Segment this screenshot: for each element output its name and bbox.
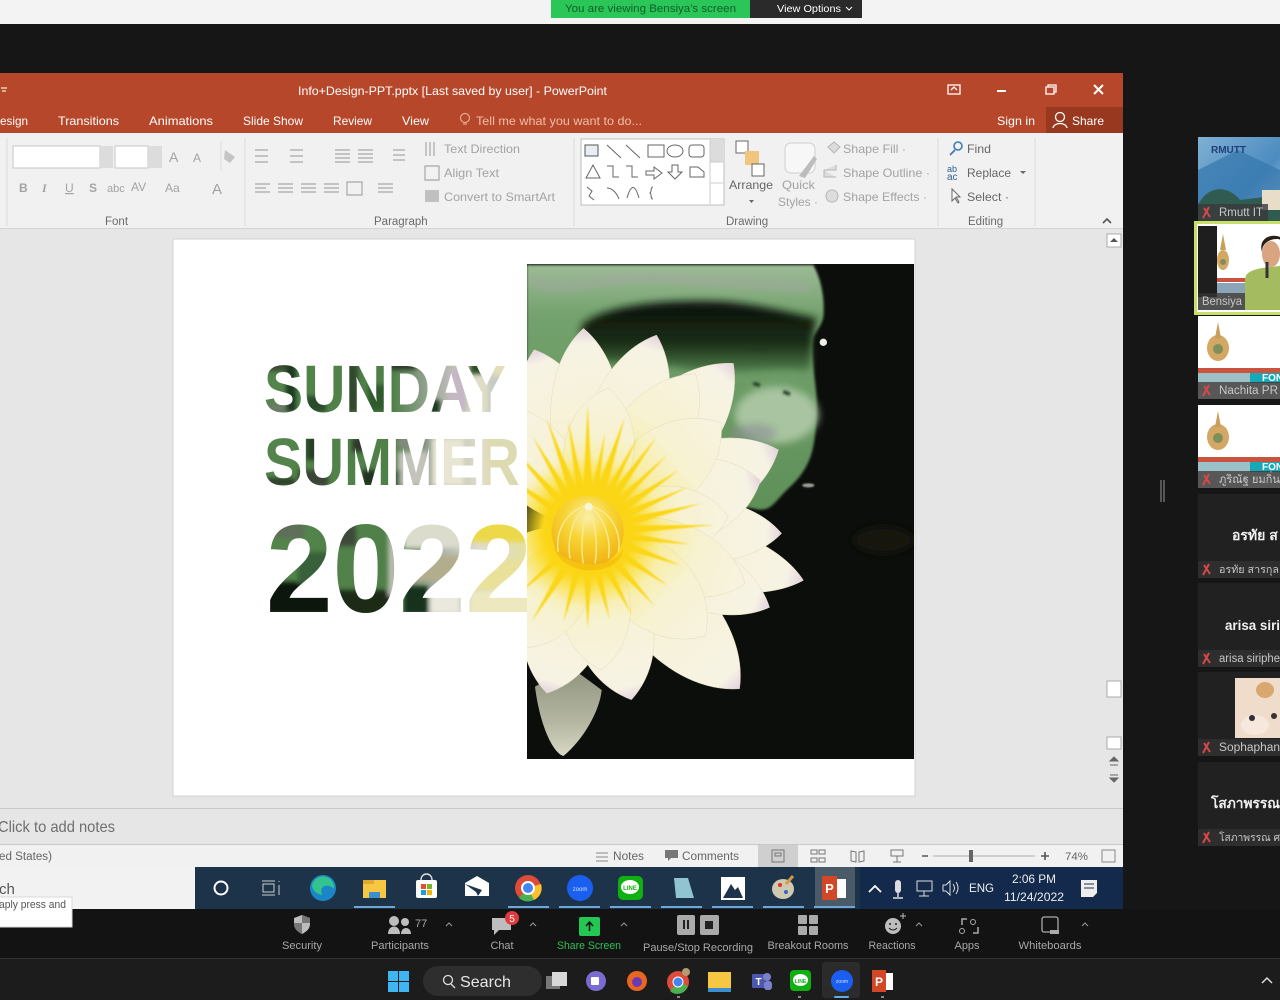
participant tile: Thai name one: อรทัย สารกุล xyxy=(1219,564,1279,576)
participant tile: Sophaphan: Sophaphan xyxy=(1219,742,1280,754)
ribbon xyxy=(0,133,1123,229)
zoom top notification bar: View Options xyxy=(777,3,841,15)
tooltip: aply press and xyxy=(0,899,66,911)
paragraph group: Paragraph xyxy=(374,216,428,228)
windows search strip xyxy=(0,867,195,909)
participant tile: arisa xyxy=(1198,583,1280,667)
ribbon tabs: esign xyxy=(0,114,28,128)
editing group: Replace xyxy=(967,166,1011,180)
apps: Apps xyxy=(954,940,980,952)
title text: SUNDAY SUMMER 2022: 2022 xyxy=(266,500,532,639)
apps xyxy=(954,919,980,952)
participant tile: Thai name one xyxy=(1198,494,1280,578)
icon: notebook xyxy=(674,878,694,898)
font group: abc xyxy=(107,183,125,195)
share screen: Share Screen xyxy=(557,940,621,952)
status bar xyxy=(0,845,1123,867)
ribbon tabs: Tell me what you want to do... xyxy=(476,114,642,128)
drawing group xyxy=(726,141,930,228)
participant tile: Thai name with emblem xyxy=(1198,405,1280,488)
icon: zoom active: zoom xyxy=(836,979,848,985)
drawing group: Quick xyxy=(782,178,816,192)
drawing group: Drawing xyxy=(726,216,768,228)
icon: chrome xyxy=(667,968,690,994)
remote windows taskbar xyxy=(195,867,1123,909)
local windows 11 taskbar xyxy=(0,959,1280,1000)
tooltip xyxy=(0,897,72,927)
editing group: ab xyxy=(947,164,957,174)
font group xyxy=(13,142,235,228)
gallery drag handle xyxy=(1161,480,1164,502)
icon: line: LINE xyxy=(795,979,807,985)
icon: file explorer xyxy=(363,880,386,898)
font group: Aa xyxy=(165,181,180,195)
icon: line xyxy=(790,970,811,991)
drawing group: Shape Outline · xyxy=(843,166,930,180)
title text: SUNDAY SUMMER 2022 xyxy=(264,352,532,639)
back sepal xyxy=(535,667,602,756)
ribbon tabs: View xyxy=(402,114,429,128)
participant tile: Thai name two: โสภาพรรณ xyxy=(1210,794,1280,811)
icon: palette xyxy=(772,876,794,899)
status bar: 74% xyxy=(1065,851,1088,863)
paragraph group xyxy=(255,142,556,228)
petals xyxy=(527,328,804,700)
powerpoint title bar: Info+Design-PPT.pptx [Last saved by user] - PowerPoint xyxy=(298,84,608,98)
editing group xyxy=(947,142,1111,228)
editing group: ac xyxy=(947,172,958,183)
drawing group: Shape Fill · xyxy=(843,142,906,156)
emblem xyxy=(1217,234,1229,270)
yellow stamens xyxy=(527,406,714,628)
system tray: ENG xyxy=(969,881,994,895)
system tray xyxy=(869,872,1097,904)
ribbon tabs: Animations xyxy=(149,114,213,128)
font group: U xyxy=(65,181,74,195)
editing group: Find xyxy=(967,142,991,156)
chat xyxy=(490,911,536,952)
icon: store xyxy=(416,874,437,898)
participant tile: arisa: arisa siriphe xyxy=(1219,653,1280,665)
title text: SUNDAY SUMMER 2022: SUMMER xyxy=(264,425,520,500)
participants: Participants xyxy=(371,940,429,952)
cortana and task view xyxy=(214,882,228,894)
ribbon tabs: Slide Show xyxy=(243,114,303,128)
participant tile: Thai name two xyxy=(1198,762,1280,846)
security: Security xyxy=(282,940,322,952)
system tray: 2:06 PM xyxy=(1012,872,1056,886)
icon: chat meet xyxy=(586,971,606,991)
icon: chrome xyxy=(515,875,542,901)
shapes gallery xyxy=(581,139,724,205)
status bar: ed States) xyxy=(0,851,52,863)
search pill xyxy=(423,966,542,996)
pause stop recording xyxy=(643,915,753,954)
system tray: 11/24/2022 xyxy=(1004,890,1064,904)
icon: edge xyxy=(310,875,336,901)
participant tile: Bensiya xyxy=(1196,222,1280,314)
font group: I xyxy=(41,181,48,195)
participants: 77 xyxy=(415,918,427,930)
icon: line xyxy=(618,876,643,900)
drawing group: Arrange xyxy=(729,178,773,192)
chat: 5 xyxy=(509,914,515,925)
icon: powerpoint xyxy=(872,970,893,992)
participant tile: Rmutt IT: RMUTT xyxy=(1211,145,1246,156)
participant tile: Bensiya: Bensiya xyxy=(1202,296,1243,308)
zoom meeting toolbar xyxy=(0,909,1280,959)
powerpoint title bar xyxy=(0,73,1123,133)
status bar: Notes xyxy=(613,849,644,863)
drawing group: Styles · xyxy=(778,195,818,209)
whiteboards: Whiteboards xyxy=(1018,940,1082,952)
reactions: Reactions xyxy=(868,940,916,952)
icon: line: LINE xyxy=(623,886,637,892)
ribbon tabs: Transitions xyxy=(58,114,119,128)
security xyxy=(282,915,322,952)
breakout rooms: Breakout Rooms xyxy=(768,940,849,952)
editing canvas xyxy=(0,229,1123,808)
font group: S xyxy=(89,181,97,195)
icon: photos xyxy=(721,877,745,900)
icon: zoom: zoom xyxy=(573,887,587,893)
lily pad xyxy=(527,265,913,553)
water lily photo xyxy=(527,264,914,759)
participant tile: Nachita PR xyxy=(1198,316,1280,399)
whiteboards xyxy=(1018,917,1088,952)
flower core xyxy=(552,496,624,570)
participant tile: Rmutt IT xyxy=(1198,137,1280,221)
icon: mail xyxy=(465,876,489,896)
window controls xyxy=(948,85,1103,94)
font group: A xyxy=(169,149,179,165)
search pill: Search xyxy=(460,974,511,991)
notes pane xyxy=(0,808,1123,845)
scrollbar xyxy=(1105,232,1123,785)
icon: teams: T xyxy=(755,977,762,988)
icon: powerpoint: P xyxy=(825,881,834,896)
participant tile: Thai name one: อรทัย ส xyxy=(1232,527,1278,543)
title text: SUNDAY SUMMER 2022: SUNDAY xyxy=(264,352,506,427)
notes pane: Click to add notes xyxy=(0,819,115,836)
font group: B xyxy=(19,181,28,195)
task view xyxy=(546,972,567,989)
icon: zoom xyxy=(567,875,593,901)
participants xyxy=(371,916,452,952)
chat: Chat xyxy=(490,940,514,952)
editing group: Select · xyxy=(967,190,1009,204)
font group: Font xyxy=(105,216,129,228)
icon: teams xyxy=(752,973,772,990)
breakout rooms xyxy=(768,915,849,952)
icon: firefox xyxy=(627,971,647,991)
pause stop recording: Pause/Stop Recording xyxy=(643,942,753,954)
status bar: Comments xyxy=(682,849,739,863)
participant tile: Thai name two: โสภาพรรณ ศ xyxy=(1219,831,1280,844)
participant tile: Nachita PR: Nachita PR xyxy=(1219,385,1278,397)
font group: A xyxy=(212,181,222,198)
icon: explorer xyxy=(708,972,731,992)
participant tile: Rmutt IT: Rmutt IT xyxy=(1219,207,1263,219)
paragraph group: Convert to SmartArt xyxy=(444,190,556,204)
paragraph group: Align Text xyxy=(444,166,500,180)
slide xyxy=(173,239,915,796)
participant tile: Sophaphan xyxy=(1198,672,1280,756)
zoom top notification bar: You are viewing Bensiya's screen xyxy=(565,3,736,15)
paragraph group: Text Direction xyxy=(444,142,520,156)
emblem xyxy=(1207,322,1229,361)
ribbon tabs: Share xyxy=(1072,114,1104,128)
editing group: Editing xyxy=(968,216,1003,228)
icon: zoom active xyxy=(822,962,860,998)
zoom top notification bar xyxy=(0,0,1280,24)
speaker xyxy=(1245,236,1280,310)
icon: windows logo xyxy=(388,971,409,992)
ribbon tabs: Sign in xyxy=(997,114,1035,128)
drawing group: Shape Effects · xyxy=(843,190,927,204)
icon: powerpoint: P xyxy=(875,975,883,989)
share screen xyxy=(557,917,627,952)
ribbon tabs xyxy=(0,107,1123,133)
reactions xyxy=(868,913,922,952)
font group: AV xyxy=(131,180,146,194)
font group: A xyxy=(193,151,201,165)
emblem xyxy=(1207,411,1229,450)
icon: powerpoint xyxy=(822,876,846,900)
ribbon tabs: Review xyxy=(333,114,372,128)
cat photo xyxy=(1235,678,1280,738)
